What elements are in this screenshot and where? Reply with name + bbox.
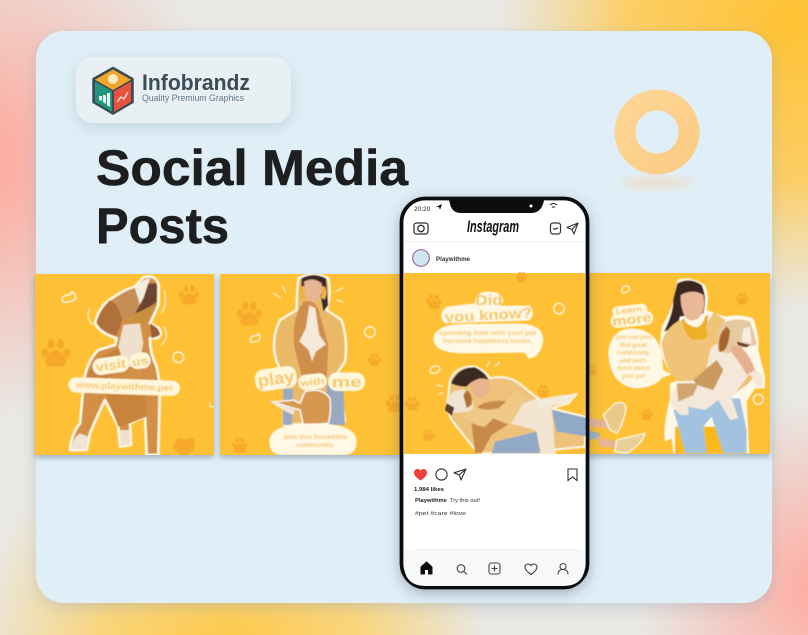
icon: comment <box>436 469 447 480</box>
panel: post 3 in phone <box>404 272 588 454</box>
panel: post 4 learn more: more about <box>617 366 650 372</box>
panel: post 4 learn more: you can join <box>616 335 651 341</box>
panel: post 4 learn more: community, <box>617 351 650 357</box>
icon: bookmark <box>568 469 577 480</box>
play label: play <box>257 367 296 391</box>
woman <box>662 280 755 453</box>
panel: post 4 learn more <box>586 273 770 454</box>
icon: heart outline <box>525 564 537 574</box>
paw decorations <box>405 272 549 441</box>
logo card <box>76 57 291 123</box>
hashtags: #pet #care #love <box>415 511 466 517</box>
learn more heading: Learn <box>615 304 642 316</box>
phone frame overlay <box>402 198 588 588</box>
title: Posts <box>96 198 229 254</box>
panel: post 2 play with me: Join this incredible <box>282 435 348 441</box>
bottom navigation bar <box>404 549 585 586</box>
paw decorations <box>588 293 748 420</box>
yellow stool <box>675 427 723 453</box>
logo tagline: Quality Premium Graphics <box>142 93 244 104</box>
learn more heading <box>609 303 654 329</box>
profile avatar <box>413 250 429 266</box>
caption: Playwithme Try this out! <box>415 498 480 504</box>
learn more heading: more <box>611 310 652 329</box>
icon: search <box>457 565 467 574</box>
phone mockup <box>402 198 588 588</box>
join caption bubble <box>269 423 357 455</box>
panel: post 4 learn more: your pet <box>622 374 645 380</box>
logo wordmark: Infobrandz <box>142 70 250 95</box>
title <box>96 140 409 254</box>
website label: www.playwithme.pet <box>75 380 173 393</box>
panel: post 1 visit us <box>35 274 215 457</box>
speech bubble <box>433 323 543 358</box>
profile name: Playwithme <box>436 257 471 263</box>
icon: profile <box>558 564 568 574</box>
icon: add <box>489 563 500 574</box>
icon: messages <box>550 223 560 234</box>
icon: send <box>567 223 578 234</box>
me label <box>328 372 365 391</box>
dog <box>294 301 328 382</box>
decorative ring with shadow <box>621 100 693 190</box>
icon: logo cube <box>94 68 132 114</box>
icon: share <box>454 469 466 480</box>
with label: with <box>299 376 325 390</box>
visit us label <box>91 351 152 376</box>
panel: post 2 play with me: me <box>332 375 362 391</box>
visit us label: us <box>131 353 150 369</box>
instagram wordmark: Instagram <box>467 218 519 236</box>
website label <box>68 377 180 396</box>
woman hugging dog <box>447 366 585 453</box>
status bar: 20:20 <box>414 206 431 213</box>
woman holding dog <box>274 274 346 425</box>
panel: post 3 in phone: Did <box>475 293 503 309</box>
paw decorations <box>232 302 404 453</box>
play label <box>254 365 298 392</box>
icon: camera <box>414 223 428 234</box>
dog <box>670 320 763 420</box>
paw decorations <box>41 285 199 457</box>
white sticker outline <box>660 278 765 453</box>
title: Social Media <box>96 140 409 196</box>
panel: post 2 play with me <box>220 274 404 455</box>
dog <box>70 276 161 455</box>
did you know heading <box>441 292 533 323</box>
panel: post 4 learn more: this great <box>620 343 647 349</box>
phone notch <box>449 198 544 213</box>
icon: home <box>421 562 432 574</box>
panel: post 2 play with me: community <box>297 443 334 449</box>
dog <box>447 390 473 413</box>
panel: post 3 in phone: spending time with your pet <box>439 330 537 337</box>
shoes extending past phone <box>588 402 645 453</box>
divider <box>404 241 585 242</box>
with label <box>298 373 327 391</box>
speech bubble <box>608 328 672 388</box>
panel: post 3 in phone: Increase happiness levels. <box>443 338 533 345</box>
icon: red heart <box>414 469 427 480</box>
likes count: 1.984 likes <box>414 487 444 493</box>
panel: post 4 learn more: and learn <box>620 358 647 364</box>
panel: post 3 in phone: you know? <box>444 306 532 326</box>
visit us label: visit <box>95 356 128 375</box>
